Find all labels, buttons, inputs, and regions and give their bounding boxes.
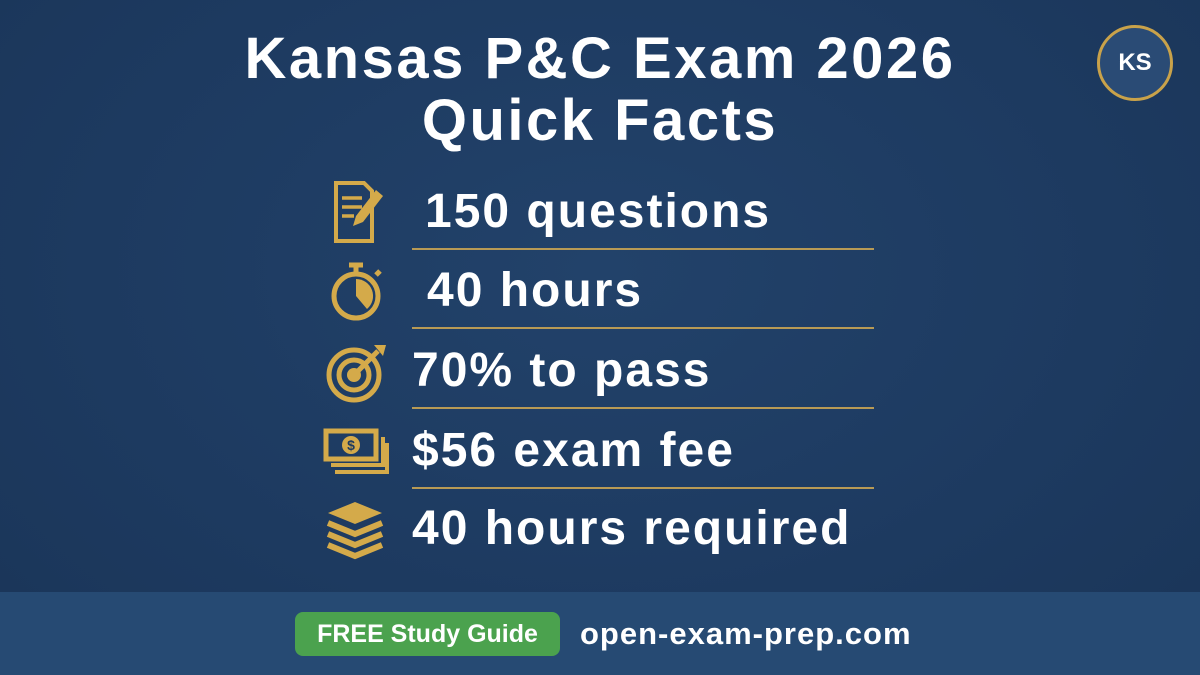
footer band [0,592,1200,675]
fact row: questions: 150 questions [425,185,771,238]
icon: money stack: $ [347,437,355,453]
title: Quick Facts [422,88,778,153]
fact row: questions [334,181,771,243]
website url: open-exam-prep.com [580,616,912,651]
icon: target with arrow [326,345,386,402]
fact row: time [332,262,643,320]
title: Kansas P&C Exam 2026 [245,26,955,91]
fact row: fee: $56 exam fee [412,424,735,477]
badge: KS: KS [1118,49,1152,76]
icon: document with pencil [334,181,383,243]
fact row: time: 40 hours [427,264,643,317]
fact row: required hours: 40 hours required [412,502,851,555]
title [245,26,955,153]
icon: money stack [324,428,389,474]
icon: stopwatch [332,262,382,320]
button: FREE Study Guide [295,612,560,656]
button: FREE Study Guide: FREE Study Guide [317,620,538,648]
fact row: passing score: 70% to pass [412,344,711,397]
icon: stack of books [326,502,384,560]
badge: KS [1097,25,1173,101]
